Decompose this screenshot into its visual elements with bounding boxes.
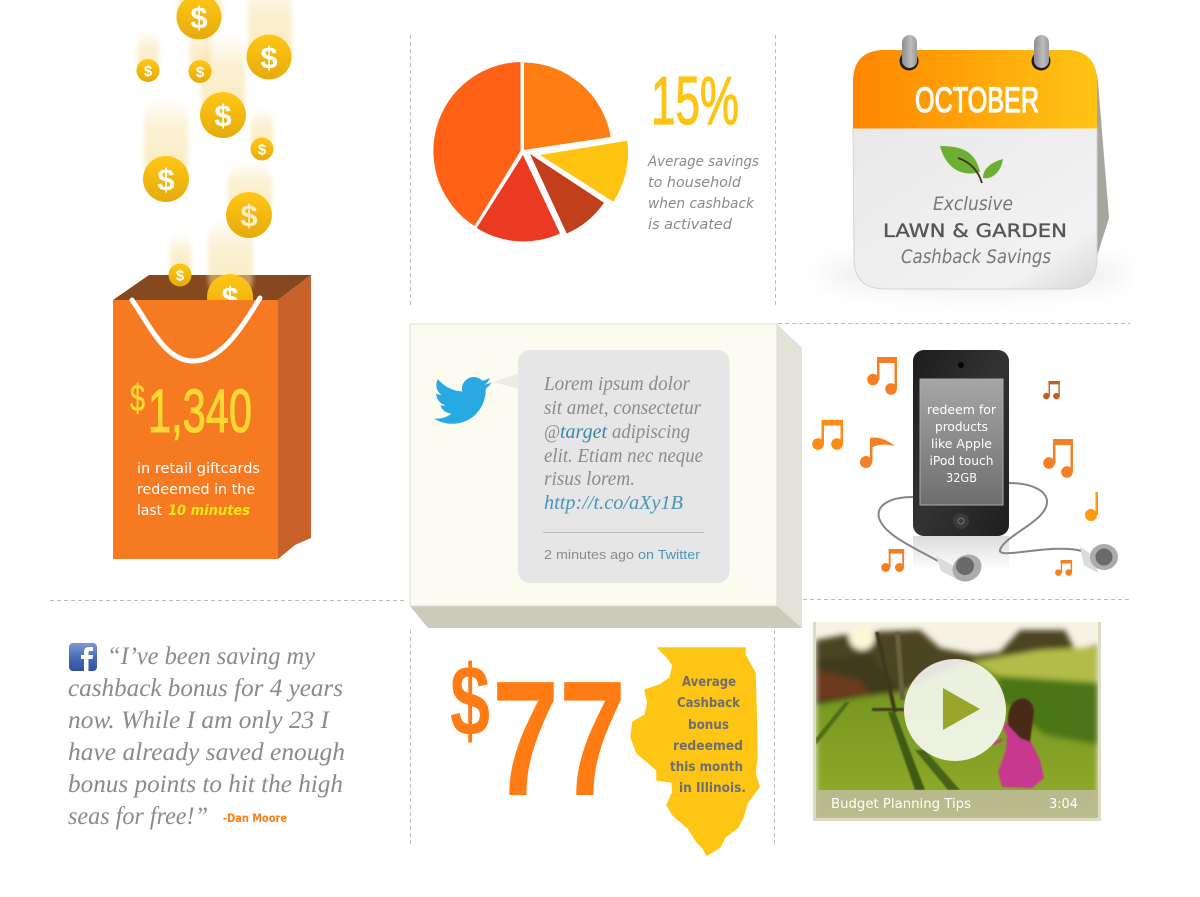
calendar text: Cashback Savings bbox=[901, 247, 1051, 268]
home button bbox=[953, 513, 969, 529]
map text: in Illinois. bbox=[679, 780, 746, 796]
music note bbox=[1043, 381, 1060, 399]
music note bbox=[1055, 560, 1072, 576]
savings caption: when cashback bbox=[648, 196, 755, 212]
facebook testimonial bbox=[68, 641, 345, 830]
coin: $ bbox=[144, 63, 153, 80]
falling coins and gift bag bbox=[113, 0, 311, 559]
music note bbox=[860, 438, 895, 468]
photo bbox=[816, 622, 1098, 818]
box front bbox=[410, 324, 777, 606]
quote bbox=[68, 641, 345, 830]
caption bar: 3:04 bbox=[1049, 796, 1078, 812]
illinois map bbox=[631, 648, 759, 855]
coin: $ bbox=[260, 40, 278, 75]
stat: $77 bbox=[450, 645, 626, 830]
music note bbox=[812, 420, 843, 450]
tweet text: Lorem ipsum dolor bbox=[543, 374, 690, 395]
screen bbox=[920, 379, 1003, 505]
left earbud bbox=[936, 549, 986, 587]
caption bar: Budget Planning Tips bbox=[831, 796, 971, 812]
savings caption: is activated bbox=[648, 217, 733, 233]
calendar text bbox=[883, 193, 1067, 268]
music note bbox=[867, 357, 897, 395]
tweet meta: on Twitter bbox=[638, 547, 701, 562]
bag side bbox=[278, 275, 311, 559]
video frame bbox=[813, 622, 1101, 821]
coin entering bag: $ bbox=[221, 280, 239, 315]
music note bbox=[1043, 439, 1073, 478]
coin bbox=[246, 34, 292, 80]
screen text: like Apple bbox=[931, 437, 992, 451]
stat: 15%: 15% bbox=[651, 63, 739, 139]
coin: $ bbox=[258, 142, 267, 158]
screen text: products bbox=[935, 420, 988, 434]
stat: $77: 77 bbox=[492, 647, 626, 830]
bag front bbox=[113, 300, 278, 559]
amount: $1,340: $ bbox=[130, 378, 145, 420]
girl bbox=[998, 722, 1044, 788]
savings caption bbox=[647, 154, 759, 233]
tweet meta bbox=[544, 547, 701, 562]
right earbud bbox=[1080, 544, 1118, 573]
coin: $ bbox=[196, 64, 205, 81]
rings bbox=[900, 35, 1050, 70]
bag caption: last bbox=[137, 503, 162, 519]
map text: Cashback bbox=[677, 695, 741, 711]
quote: “I’ve been saving my bbox=[107, 641, 316, 670]
calendar bbox=[820, 35, 1130, 293]
coin bbox=[188, 60, 212, 83]
coin bbox=[250, 138, 274, 160]
tweet text: elit. Etiam nec neque bbox=[544, 446, 703, 467]
music note bbox=[881, 549, 904, 572]
tweet text: @ bbox=[544, 422, 560, 443]
coin: $ bbox=[240, 198, 258, 233]
tweet text: sit amet, consectetur bbox=[544, 398, 701, 419]
coin: $ bbox=[176, 268, 185, 284]
stat: $77: $ bbox=[450, 645, 490, 757]
music note bbox=[1085, 492, 1098, 521]
play button bbox=[904, 659, 1006, 761]
tweet text: risus lorem. bbox=[544, 469, 635, 490]
map text bbox=[670, 674, 746, 796]
speech bubble bbox=[493, 350, 730, 583]
calendar page bbox=[853, 128, 1097, 289]
tweet text: http://t.co/aXy1B bbox=[544, 493, 683, 514]
tweet meta: 2 minutes ago bbox=[544, 547, 634, 562]
caption bar bbox=[816, 790, 1098, 818]
box bottom side bbox=[410, 606, 802, 628]
calendar text: LAWN & GARDEN bbox=[883, 221, 1067, 242]
calendar shadow bbox=[820, 255, 1130, 293]
coin: $ bbox=[214, 98, 232, 133]
bag caption: in retail giftcards bbox=[137, 461, 260, 477]
quote: seas for free!” bbox=[68, 801, 208, 830]
coin bbox=[200, 92, 246, 138]
map text: bonus bbox=[688, 717, 729, 733]
screen text: 32GB bbox=[946, 471, 977, 485]
coin bbox=[226, 192, 272, 238]
screen text: redeem for bbox=[927, 403, 996, 417]
savings caption: to household bbox=[648, 175, 742, 191]
bag caption bbox=[137, 461, 260, 519]
tweet text bbox=[543, 374, 703, 514]
tweet box bbox=[410, 324, 802, 628]
amount: $1,340 bbox=[130, 377, 252, 445]
quote: have already saved enough bbox=[68, 737, 345, 766]
bag caption: 10 minutes bbox=[168, 503, 250, 519]
tweet text: adipiscing bbox=[612, 422, 690, 443]
pie chart bbox=[433, 62, 628, 241]
coin bbox=[136, 59, 160, 82]
map text: redeemed bbox=[673, 738, 743, 754]
coin: $ bbox=[190, 0, 208, 35]
coin bbox=[176, 0, 222, 40]
icon: leaf sprout bbox=[940, 146, 1003, 183]
screen text: iPod touch bbox=[930, 454, 994, 468]
map text: Average bbox=[682, 674, 736, 690]
tweet text: target bbox=[560, 422, 608, 443]
camera bbox=[958, 362, 964, 368]
coin: $ bbox=[157, 162, 175, 197]
bag interior bbox=[113, 275, 311, 300]
video thumbnail bbox=[813, 622, 1101, 821]
savings caption: Average savings bbox=[647, 154, 759, 170]
quote: bonus points to hit the high bbox=[68, 769, 343, 798]
screen text bbox=[927, 403, 996, 485]
map text: this month bbox=[670, 759, 743, 775]
coin entering bag bbox=[207, 274, 253, 320]
ipod body bbox=[913, 350, 1009, 536]
back pages bbox=[1070, 50, 1109, 270]
bag handle bbox=[132, 298, 260, 361]
ipod reflection bbox=[913, 536, 1009, 570]
coin trails bbox=[138, 0, 292, 299]
earphone cable bbox=[879, 483, 1082, 561]
bag caption: redeemed in the bbox=[137, 482, 255, 498]
coin bbox=[143, 156, 189, 202]
icon: twitter bird bbox=[434, 377, 492, 424]
attribution: -Dan Moore bbox=[223, 811, 287, 825]
calendar header bbox=[853, 50, 1097, 128]
quote: now. While I am only 23 I bbox=[68, 705, 330, 734]
ipod illustration bbox=[812, 350, 1118, 587]
icon: facebook bbox=[69, 643, 97, 671]
quote: cashback bonus for 4 years bbox=[68, 673, 343, 702]
month: OCTOBER bbox=[915, 81, 1039, 120]
amount: $1,340: 1,340 bbox=[148, 377, 252, 445]
box right side bbox=[777, 324, 802, 628]
calendar text: Exclusive bbox=[933, 193, 1013, 215]
coin bbox=[168, 264, 192, 286]
